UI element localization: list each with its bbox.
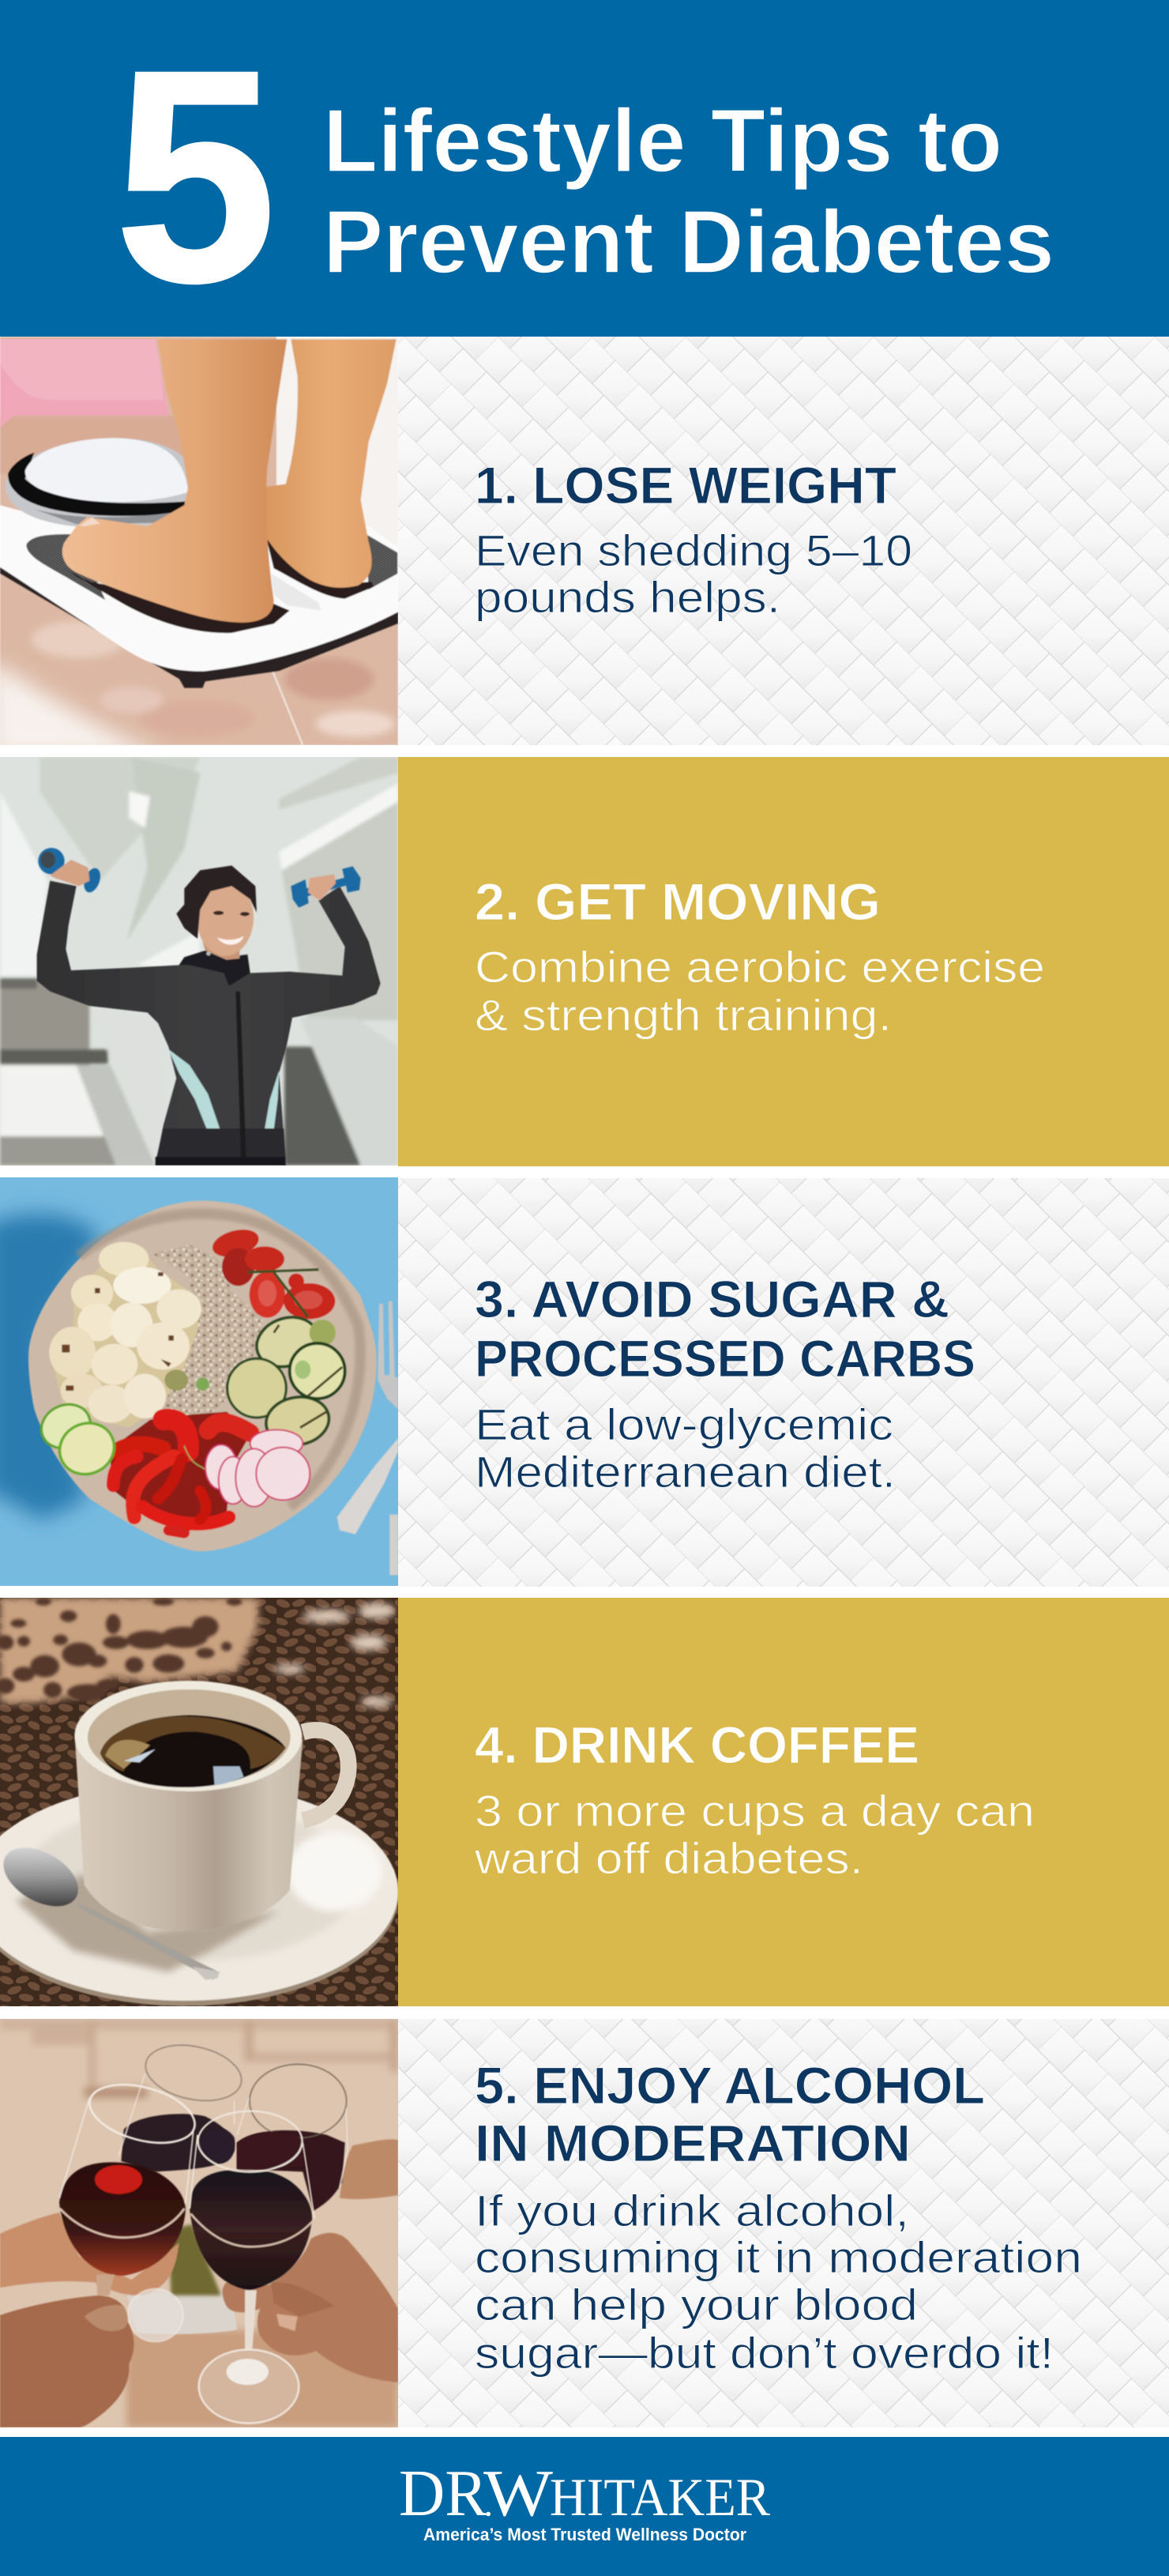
photo: feet on a bathroom scale [0,337,398,758]
tagline: America’s Most Trusted Wellness Doctor [423,2525,746,2544]
title: Prevent Diabetes [323,192,1054,292]
heading [475,1270,975,1388]
tomatoes [212,1229,259,1258]
panel 1: lose weight [0,337,1169,758]
logo: Dr. Whitaker [399,2457,771,2530]
photo: coffee cup on saucer with beans [0,1598,399,2006]
cup handle [303,1731,348,1821]
cup [74,1681,303,1931]
body text: consuming it in moderation [475,2232,1082,2282]
heading: IN MODERATION [475,2114,911,2172]
heading: 5. ENJOY ALCOHOL [475,2056,985,2115]
title: Lifestyle Tips to [323,91,1002,190]
body text: Mediterranean diet. [475,1447,896,1497]
heading: PROCESSED CARBS [475,1329,975,1388]
heading: 4. DRINK COFFEE [475,1715,919,1774]
fork and knife [378,1301,398,1409]
body text [475,942,1045,1040]
back glasses [118,2037,348,2341]
body text: pounds helps. [475,572,780,622]
text background: woven texture [398,1178,1169,1587]
logo: Dr. Whitaker: DR [399,2457,487,2530]
woman [37,865,381,1166]
body text: 3 or more cups a day can [475,1786,1035,1836]
peppers [111,1412,253,1533]
gold text background [398,1598,1169,2006]
panel 2: get moving [0,757,1169,1166]
logo: Dr. Whitaker: HITAKER [550,2467,771,2527]
front left glass [59,2074,201,2295]
limes [39,1402,92,1449]
photo: woman lifting dumbbells [0,757,398,1166]
body text: Combine aerobic exercise [475,942,1045,992]
logo: Dr. Whitaker: W [483,2457,554,2530]
radishes [205,1429,310,1507]
grilled zucchini [254,1315,314,1369]
photo: four hands toasting red wine [0,2019,398,2427]
hands [0,2139,398,2382]
panel 5: enjoy alcohol in moderation [0,2019,1169,2427]
heading [475,2056,985,2172]
body text: If you drink alcohol, [475,2186,909,2235]
heading: 3. AVOID SUGAR & [475,1270,949,1328]
panel 4: drink coffee [0,1598,1169,2006]
heading: 1. LOSE WEIGHT [475,456,896,514]
big numeral 5: 5 [115,7,276,345]
front right glass [190,2111,314,2423]
logo: Dr. Whitaker: . [485,2493,491,2522]
footer banner [0,2437,1169,2576]
body text [475,2186,1082,2378]
body text: ward off diabetes. [474,1833,863,1883]
heading: 2. GET MOVING [475,872,881,931]
salad bowl [126,2224,237,2334]
quinoa [152,1245,263,1422]
body text [475,1399,896,1497]
body text [474,1786,1035,1883]
photo: vegetable bowl on blue table [0,1177,398,1586]
cauliflower [54,1260,201,1427]
panel 3: avoid sugar and processed carbs [0,1177,1169,1587]
body text: Even shedding 5–10 [475,525,912,575]
body text: can help your blood [475,2280,918,2329]
gold text background [398,757,1169,1166]
spoon [0,1836,220,1979]
body text [475,525,912,622]
bowl [28,1201,398,1575]
front fist [0,2295,133,2427]
body text: sugar—but don’t overdo it! [475,2328,1054,2378]
dumbbells [38,848,361,908]
body text: & strength training. [475,990,892,1040]
text background: woven texture [398,2019,1169,2427]
saucer [0,1782,399,2006]
text background: woven texture [398,337,1169,745]
body text: Eat a low-glycemic [475,1399,893,1449]
title [323,91,1054,292]
header banner [0,0,1169,345]
